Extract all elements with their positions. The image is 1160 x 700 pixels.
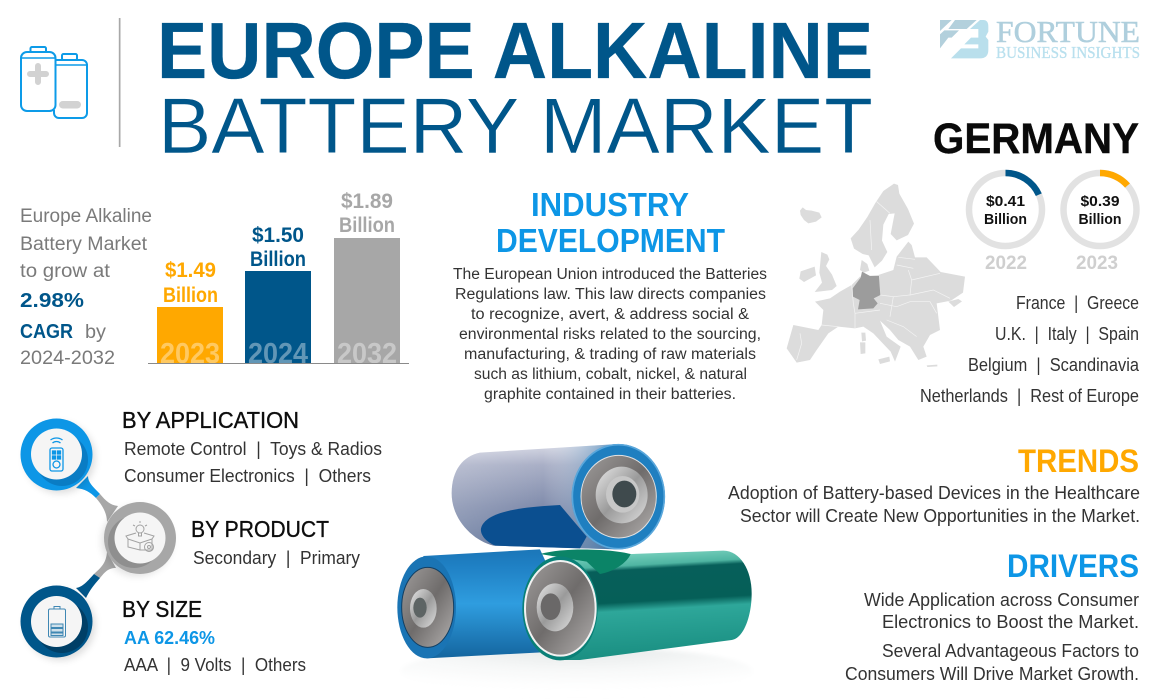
bar: 2024: $1.50 (252, 224, 304, 247)
market growth text: 2024-2032 (20, 348, 115, 369)
icon: remote control (50, 438, 63, 471)
drivers: Electronics to Boost the Market. (882, 612, 1139, 632)
drivers: Several Advantageous Factors to (882, 641, 1139, 661)
list of countries: Belgium | Scandinavia (968, 355, 1140, 375)
bar: 2024: 2024 (248, 338, 308, 370)
segment: by application (122, 407, 382, 486)
drivers (845, 548, 1139, 684)
trends: TRENDS (1018, 443, 1139, 479)
market growth text: 2.98% (20, 290, 84, 312)
logo: Fortune Business Insights (940, 14, 1140, 62)
segment: by size: AA 62.46% (124, 628, 215, 648)
segment connector (76, 476, 118, 598)
battery: top (452, 444, 665, 549)
logo: Fortune Business Insights: BUSINESS INSIGHTS (996, 43, 1140, 62)
segment: by application: Consumer Electronics | Others (124, 466, 371, 486)
list of countries: U.K. | Italy | Spain (995, 324, 1139, 344)
industry development text: Regulations law. This law directs companies (455, 286, 766, 303)
bar: 2024: Billion (250, 248, 306, 271)
battery: right green (522, 549, 752, 660)
segment: by size: BY SIZE (122, 596, 202, 622)
logo mark (940, 20, 988, 58)
industry development text: to recognize, avert, & address social & (471, 306, 750, 323)
industry development text: such as lithium, cobalt, nickel, & natural (474, 366, 747, 383)
donut: 2022: Billion (984, 212, 1027, 228)
donut: 2022: 2022 (985, 253, 1027, 274)
heading: industry development: DEVELOPMENT (496, 222, 725, 259)
drivers: DRIVERS (1007, 548, 1139, 584)
segment: by product: Secondary | Primary (193, 548, 360, 568)
heading: Germany: GERMANY (933, 115, 1139, 163)
industry development text: graphite contained in their batteries. (484, 386, 736, 403)
heading: industry development (496, 186, 725, 259)
map: Europe with Germany highlighted (787, 184, 965, 367)
bar chart (148, 190, 409, 370)
node: by size (20, 586, 95, 660)
donut: 2022 (969, 173, 1042, 274)
trends (728, 443, 1140, 526)
title: BATTERY MARKET (158, 81, 873, 170)
market growth text: Europe Alkaline (20, 206, 152, 227)
illustration: three stacked batteries (397, 444, 753, 697)
segment: by application: Remote Control | Toys & Radios (124, 439, 382, 459)
donut: 2023: 2023 (1076, 253, 1118, 274)
bar: 2023: Billion (163, 284, 218, 307)
icon: battery level (48, 606, 66, 637)
node: by product (102, 502, 176, 576)
trends: Sector will Create New Opportunities in the Market. (740, 506, 1140, 526)
donut: 2022: $0.41 (986, 194, 1025, 210)
title: EUROPE ALKALINE (157, 6, 873, 95)
industry development text: manufacturing, & trading of raw materials (464, 346, 756, 363)
industry development text: The European Union introduced the Batteries (453, 266, 767, 283)
trends: Adoption of Battery-based Devices in the Healthcare (728, 483, 1140, 503)
bar: 2023 (157, 259, 223, 370)
bar: 2032: $1.89 (341, 190, 393, 213)
drivers: Wide Application across Consumer (864, 590, 1139, 610)
list of countries: Netherlands | Rest of Europe (920, 386, 1139, 406)
bar: 2023: $1.49 (165, 259, 216, 282)
market growth text: to grow at (20, 261, 111, 282)
market growth text (20, 206, 152, 369)
bar: 2032 (334, 190, 400, 370)
icon: box with bulb and gear (126, 521, 154, 552)
segment: by product: BY PRODUCT (191, 516, 329, 542)
market growth text: by (85, 322, 107, 343)
market growth text: CAGR (20, 321, 73, 343)
list of countries: France | Greece (1016, 293, 1139, 313)
segment: by product (191, 516, 360, 568)
bar: 2024 (245, 224, 311, 370)
segment: by size (122, 596, 306, 675)
donut: 2023: $0.39 (1080, 194, 1120, 210)
battery: left (397, 549, 587, 658)
donut: 2023: Billion (1078, 212, 1122, 228)
node: by application (20, 418, 95, 493)
heading: industry development: INDUSTRY (531, 186, 689, 223)
segment: by application: BY APPLICATION (122, 407, 299, 433)
bar: 2032: Billion (339, 214, 395, 237)
industry development text: environmental risks related to the sourcing, (459, 326, 761, 343)
donut: 2023 (1064, 173, 1136, 274)
industry development text (453, 266, 767, 403)
title (157, 6, 873, 170)
list of countries (920, 293, 1140, 406)
bar: 2032: 2032 (337, 338, 397, 370)
icon: two batteries (21, 47, 87, 118)
market growth text: Battery Market (20, 234, 148, 255)
bar: 2023: 2023 (160, 338, 220, 370)
drivers: Consumers Will Drive Market Growth. (845, 664, 1139, 684)
logo: Fortune Business Insights: FORTUNE (996, 14, 1140, 49)
segment: by size: AAA | 9 Volts | Others (124, 655, 306, 675)
